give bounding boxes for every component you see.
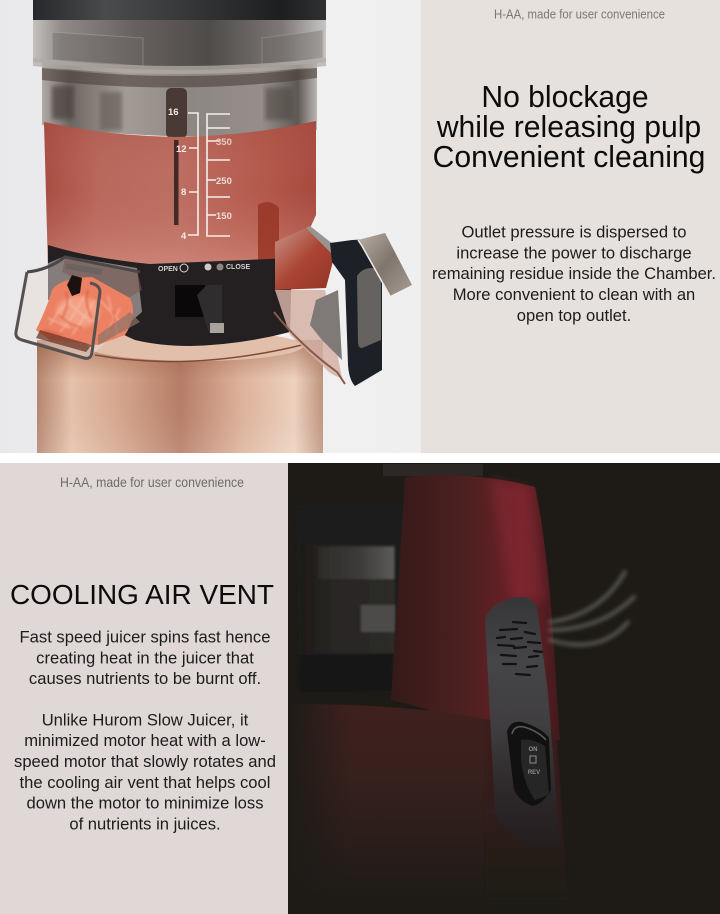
body text: minimized motor heat with a low- [24, 731, 266, 750]
body text [14, 628, 276, 834]
open and close labels [158, 264, 250, 273]
subtitle: H-AA, made for user convenience [494, 8, 665, 22]
body text: More convenient to clean with an [453, 285, 695, 304]
scale numbers: 16 [168, 107, 179, 118]
heading: while releasing pulp [436, 111, 701, 144]
panel: outlet description [421, 0, 720, 453]
air vent grey panel [485, 597, 560, 850]
juicer base body [37, 331, 323, 453]
body text: Fast speed juicer spins fast hence [20, 628, 270, 646]
clear chamber silhouette [296, 505, 405, 692]
upper clear collar [33, 20, 326, 74]
body text: of nutrients in juices. [69, 814, 221, 834]
measurement scale [168, 107, 232, 242]
panel: cooling description [0, 463, 288, 914]
neck of juicer [383, 464, 483, 476]
body text: increase the power to discharge [456, 244, 692, 262]
juice in chamber [44, 121, 316, 268]
body text: open top outlet. [517, 306, 631, 325]
scale numbers: 150 [216, 211, 232, 222]
scale numbers: 12 [176, 144, 187, 155]
scale numbers: 250 [216, 176, 232, 187]
panel: cooling vent photo [288, 463, 720, 914]
lower red body [288, 700, 568, 905]
subtitle: H-AA, made for user convenience [60, 474, 244, 490]
body text: creating heat in the juicer that [36, 648, 254, 668]
scale numbers: 4 [181, 231, 187, 242]
power switch [507, 722, 551, 806]
juice spout [274, 226, 412, 386]
body text [432, 222, 716, 325]
body text: remaining residue inside the Chamber. [432, 264, 716, 283]
pulp outlet cup [15, 256, 142, 358]
heading: COOLING AIR VENT [10, 579, 274, 610]
body text: causes nutrients to be burnt off. [29, 669, 261, 688]
body text: the cooling air vent that helps cool [20, 773, 270, 792]
heading [433, 81, 705, 174]
heading: Convenient cleaning [433, 141, 705, 174]
body text: speed motor that slowly rotates and [14, 752, 276, 771]
heading: No blockage [481, 81, 649, 114]
switch labels [528, 747, 540, 776]
scale numbers: 350 [216, 137, 232, 148]
panel: juicer outlet photo [0, 0, 421, 453]
switch labels: REV [528, 770, 540, 776]
switch labels: ON [528, 747, 538, 753]
strainer chamber [42, 56, 317, 138]
open and close labels: CLOSE [226, 264, 250, 271]
body text: down the motor to minimize loss [26, 794, 264, 812]
body text: Outlet pressure is dispersed to [461, 222, 687, 242]
scale numbers [168, 107, 232, 242]
body text: Unlike Hurom Slow Juicer, it [42, 710, 249, 730]
air flow lines [550, 572, 634, 645]
vent slots [497, 622, 542, 675]
scale numbers: 8 [181, 187, 186, 198]
dark outlet housing [48, 245, 292, 346]
open and close labels: OPEN [158, 266, 178, 273]
upper red body [391, 475, 560, 740]
top cap [33, 0, 326, 20]
